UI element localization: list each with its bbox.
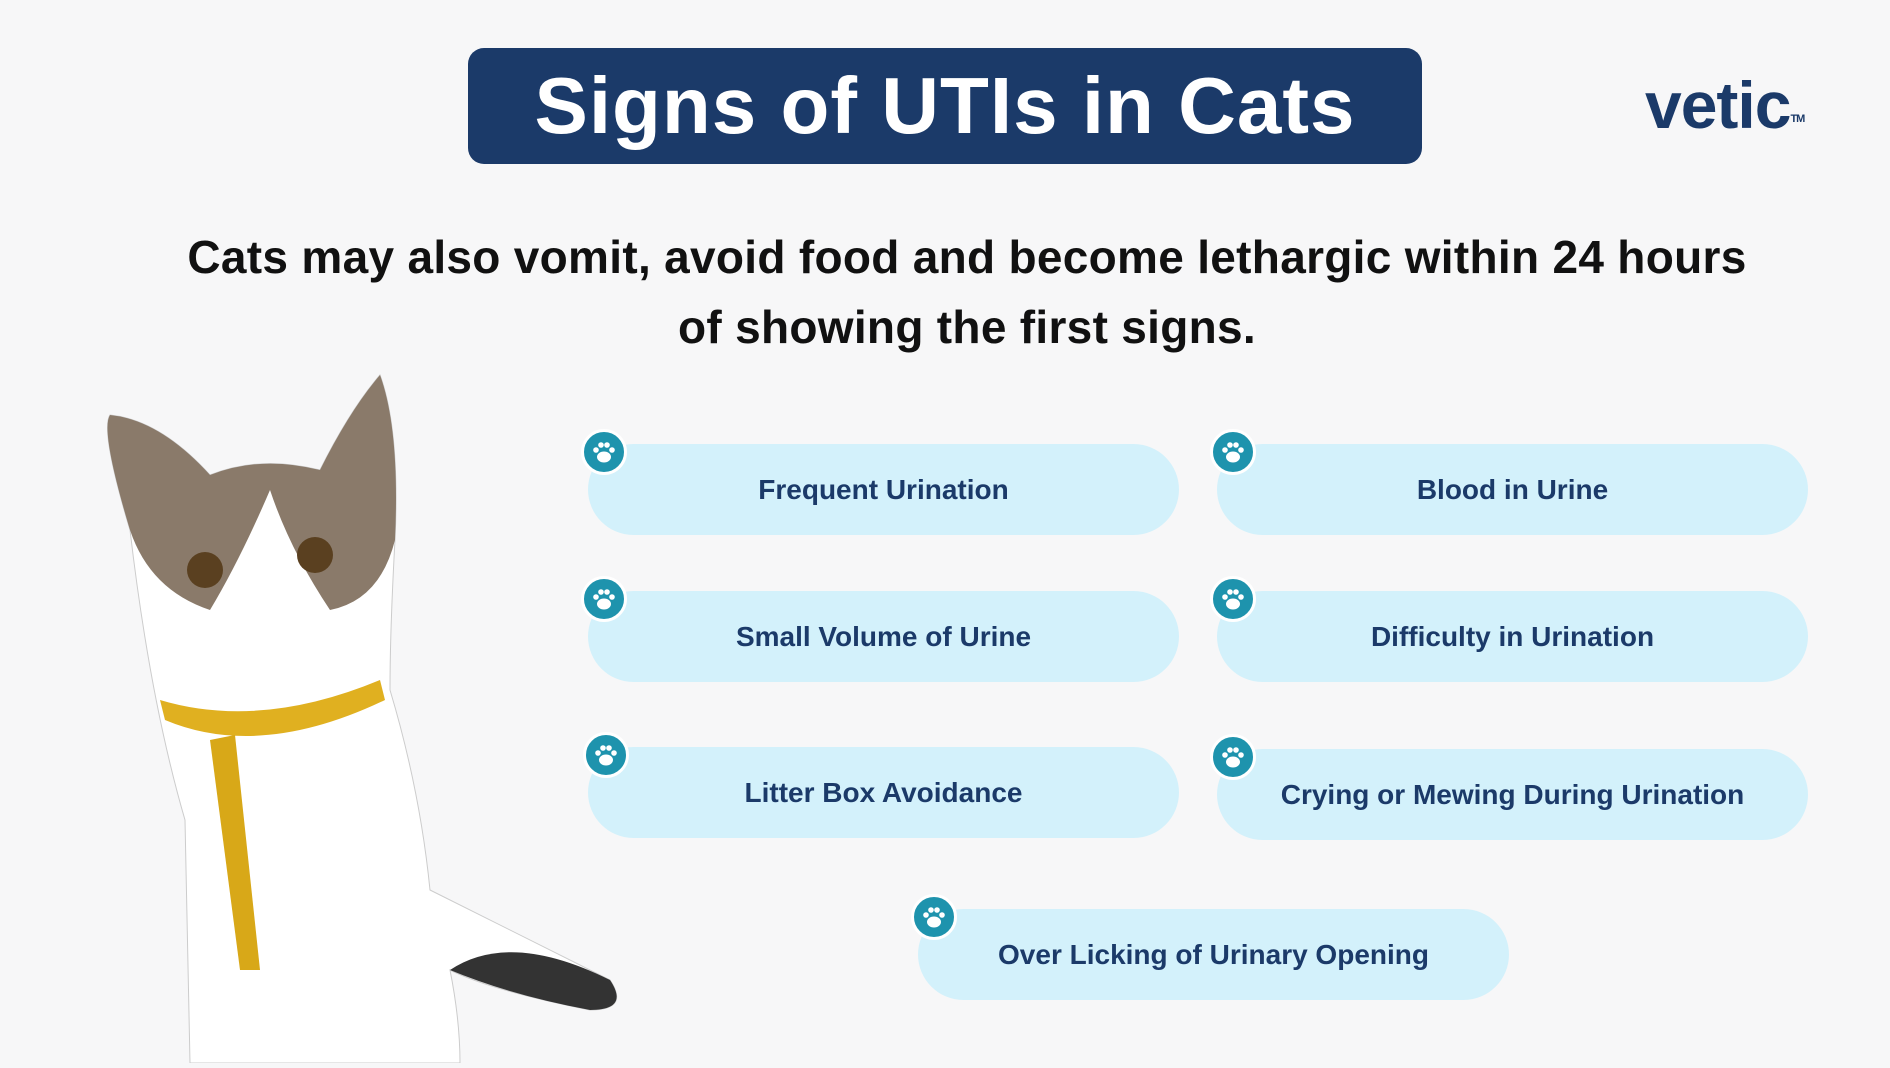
pill: Litter Box: Litter Box Avoidance xyxy=(744,777,1022,808)
subtitle text: of showing the first signs. xyxy=(678,301,1256,353)
icon: paw xyxy=(1210,429,1256,475)
pill: Difficulty: Difficulty in Urination xyxy=(1371,621,1654,652)
pill: Small Volume xyxy=(588,591,1179,682)
logo: vetic: veticTM xyxy=(1645,68,1804,142)
icon: paw xyxy=(583,732,629,778)
illustration: cat xyxy=(107,374,618,1063)
subtitle text xyxy=(187,231,1747,353)
icon: paw xyxy=(1210,576,1256,622)
pill: Over Licking xyxy=(918,909,1509,1000)
icon: paw xyxy=(911,894,957,940)
title xyxy=(468,48,1422,164)
pill: Litter Box xyxy=(588,747,1179,838)
subtitle text: Cats may also vomit, avoid food and become lethargic within 24 hours xyxy=(187,231,1747,283)
pill: Crying: Crying or Mewing During Urination xyxy=(1281,779,1744,810)
pill: Frequent Urination xyxy=(588,444,1179,535)
pill: Over Licking: Over Licking of Urinary Opening xyxy=(998,939,1429,970)
pill: Blood in Urine: Blood in Urine xyxy=(1417,474,1608,505)
pill: Crying xyxy=(1217,749,1808,840)
title: Signs of UTIs in Cats xyxy=(534,61,1356,150)
pill: Small Volume: Small Volume of Urine xyxy=(736,621,1031,652)
icon: paw xyxy=(581,429,627,475)
icon: paw xyxy=(1210,734,1256,780)
icon: paw xyxy=(581,576,627,622)
pill: Difficulty xyxy=(1217,591,1808,682)
pill: Frequent Urination: Frequent Urination xyxy=(758,474,1009,505)
pill: Blood in Urine xyxy=(1217,444,1808,535)
